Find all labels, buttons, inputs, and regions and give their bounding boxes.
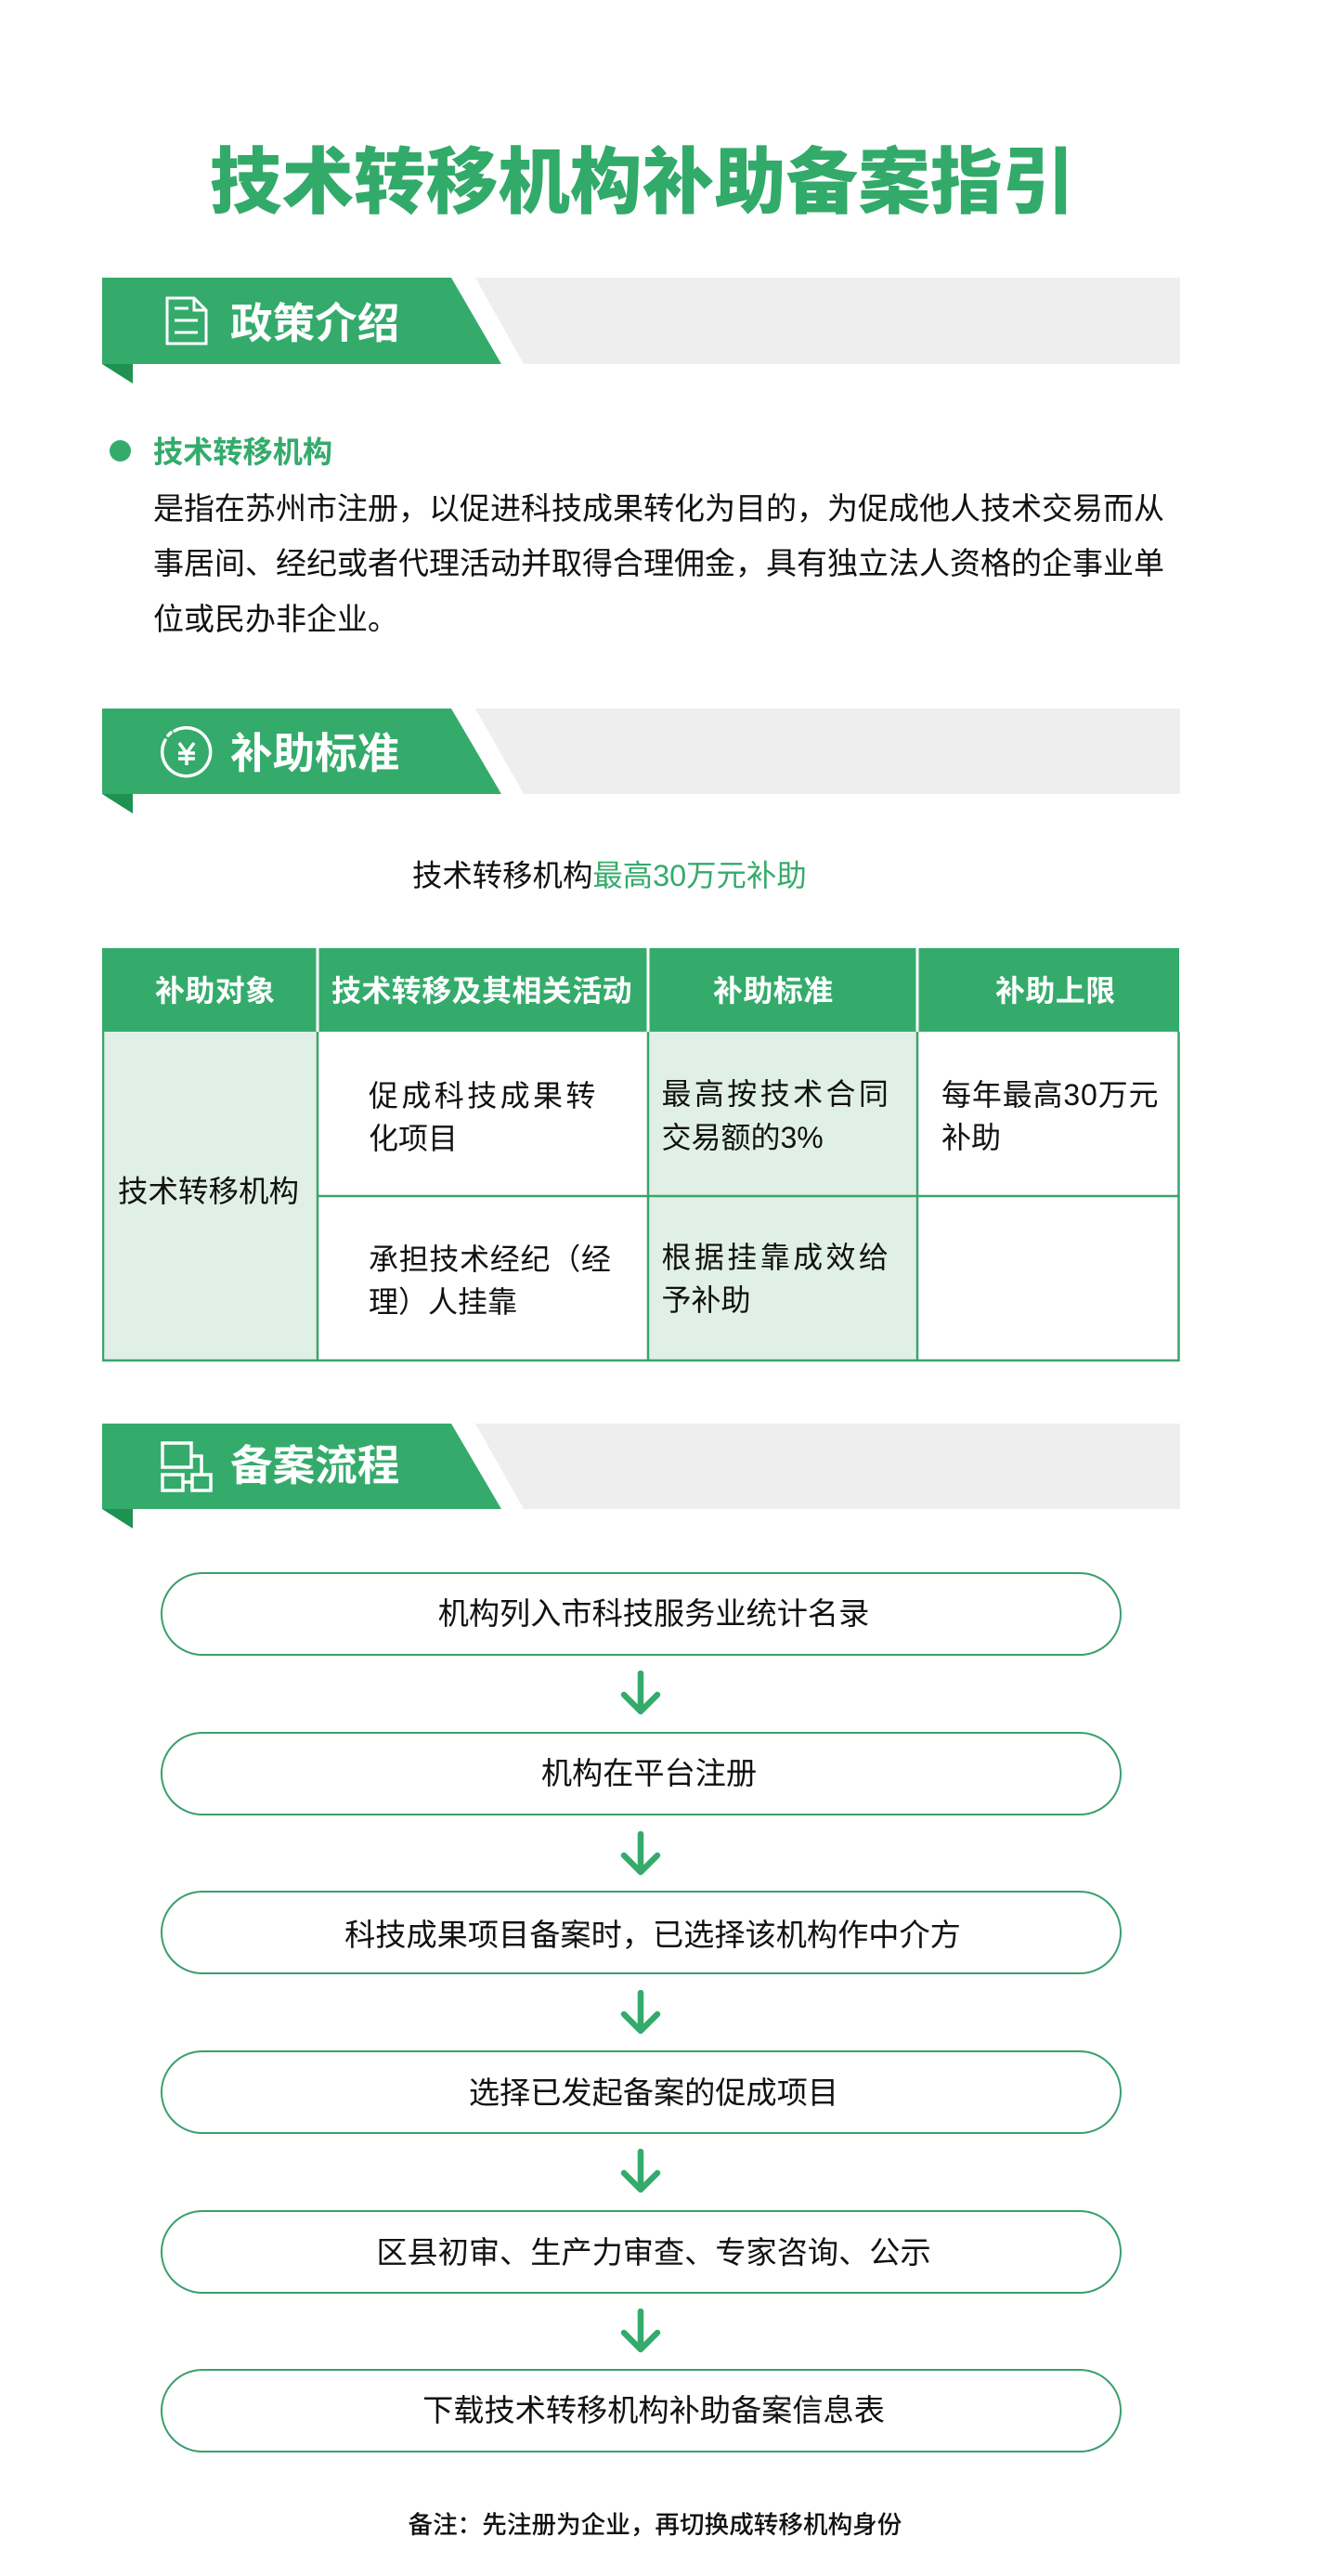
cap [941,1077,1159,1154]
definition paragraph: 是指在苏州市注册，以促进科技成果转化为目的，为促成他人技术交易而从 事居间、经纪或者代理活动并取得合理佣金，具有独立法人资格的企事业单 位或民办非企业。 [153,490,1164,635]
flow step 4 text: 选择已发起备案的促成项目 [469,2076,838,2111]
standard 2: 予补助 [661,1283,751,1317]
standard 1 [661,1077,891,1154]
section header: 备案流程: 备案流程 [230,1442,399,1490]
flow step 1 [161,1572,1122,1656]
activity 2: 承担技术经纪（经 [369,1242,612,1276]
flow step 5 text: 区县初审、生产力审查、专家咨询、公示 [376,2236,931,2270]
section header: 政策介绍: 政策介绍 [230,300,399,347]
subsidy table [102,948,1180,1361]
subsidy table: 补助标准 [713,974,834,1008]
flow step 3 text: 科技成果项目备案时，已选择该机构作中介方 [344,1919,961,1953]
standard 1: 最高按技术合同 [661,1077,891,1111]
flow step 5 [161,2210,1122,2294]
activity 1: 化项目 [369,1122,458,1155]
cap: 每年最高30万元 [941,1077,1159,1111]
activity 2 [369,1242,612,1319]
flow step 1 text: 机构列入市科技服务业统计名录 [438,1597,869,1632]
section header: 备案流程 [102,1424,1180,1529]
arrow 2 [620,1831,661,1876]
policy intro text [110,436,1164,635]
subsidy table: 技术转移及其相关活动 [331,974,632,1008]
arrow 3 [620,1990,661,2034]
table header cells: 补助对象 [155,974,276,1008]
flow step 2 [161,1732,1122,1815]
section header: 补助标准 [102,709,1180,813]
flow step 6 text: 下载技术转移机构补助备案信息表 [422,2394,885,2428]
arrow 4 [620,2149,661,2193]
flow step 4 [161,2050,1122,2134]
title: 技术转移机构补助备案指引 [210,143,1074,223]
flow step 6 [161,2369,1122,2452]
activity 1 [369,1079,599,1155]
subsidy subtitle: 技术转移机构最高30万元补助 [412,859,807,892]
flow step 2 text: 机构在平台注册 [541,1757,757,1791]
standard 2: 根据挂靠成效给 [661,1241,891,1274]
activity 1: 促成科技成果转 [369,1079,599,1112]
cap: 补助 [941,1121,1001,1154]
section header: 补助标准: 补助标准 [230,730,399,777]
footnote: 备注：先注册为企业，再切换成转移机构身份 [409,2511,902,2539]
bullet dot [110,440,131,462]
standard 2 [661,1241,891,1317]
arrow 5 [620,2309,661,2353]
target cell: 技术转移机构 [118,1175,299,1208]
standard 1: 交易额的3% [661,1121,824,1154]
section header: 政策介绍 [102,278,1180,384]
activity 2: 理）人挂靠 [369,1285,517,1319]
arrow 1 [620,1671,661,1714]
subsidy table: 补助上限 [995,974,1116,1008]
term heading: 技术转移机构 [153,436,332,469]
flow step 3 [161,1891,1122,1974]
